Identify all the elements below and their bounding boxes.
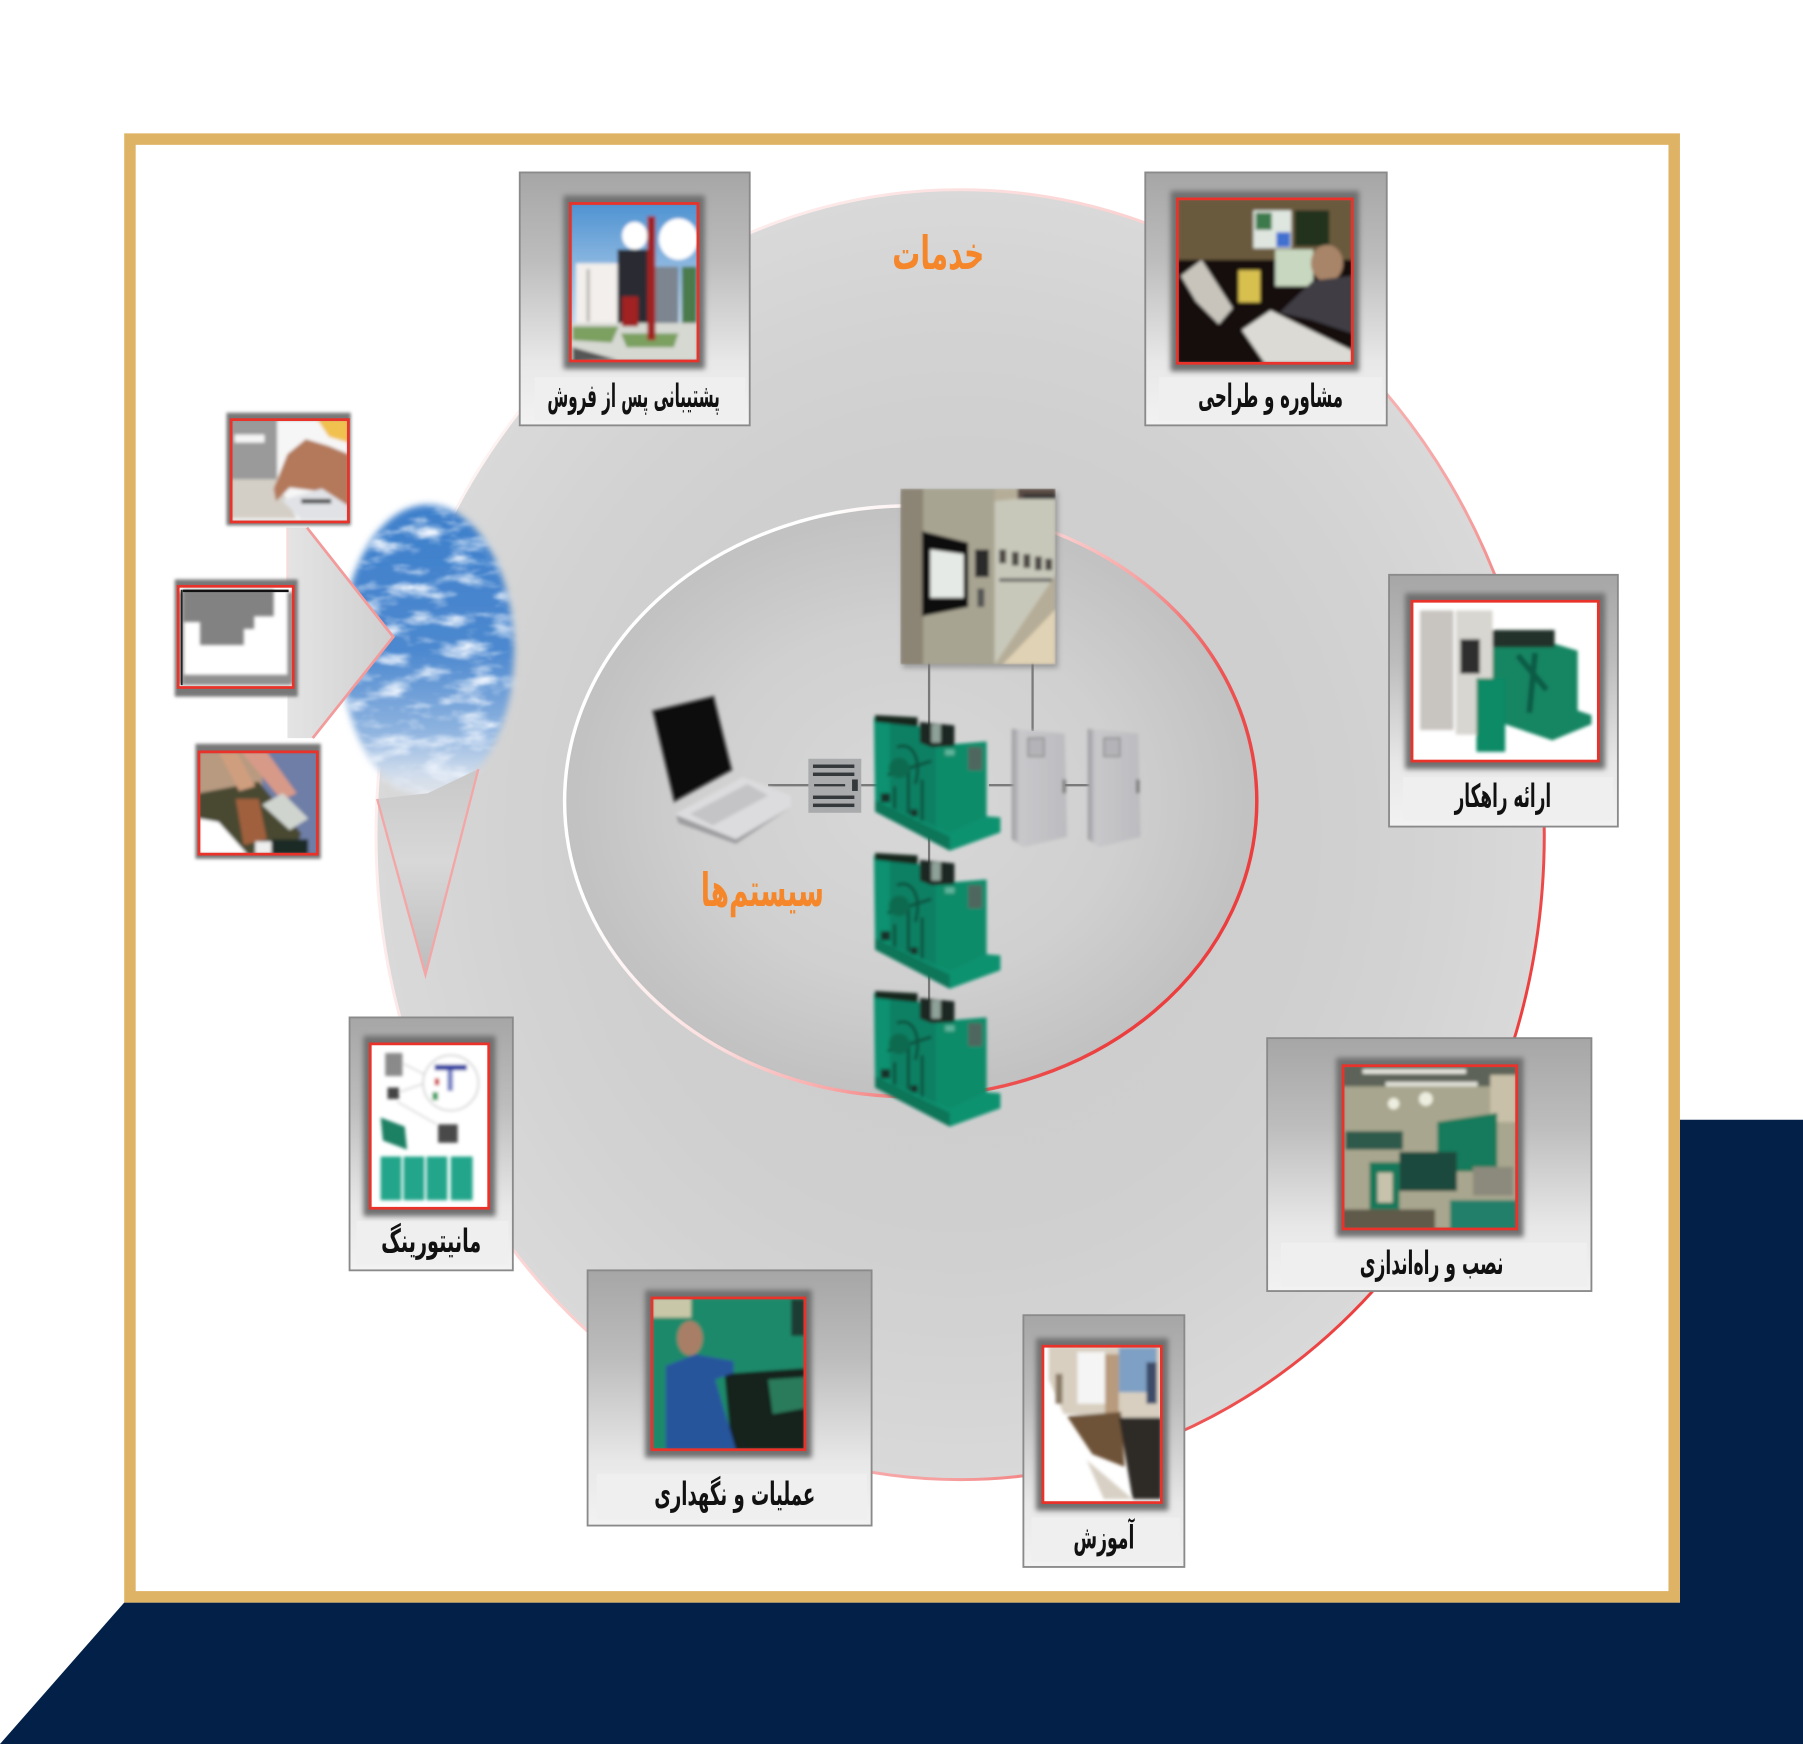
heading: services: خدمات <box>892 226 984 280</box>
generator 3 <box>874 991 1000 1127</box>
card: monitoring <box>350 1017 513 1270</box>
label: ارائه راهکار <box>1454 777 1551 815</box>
generator 2 <box>874 853 1000 989</box>
left pointer triangle <box>287 528 393 738</box>
photo: keyboard <box>227 413 351 525</box>
photo: building <box>563 195 705 369</box>
card: after-sales support <box>520 172 750 425</box>
photo: monitoring diagram <box>363 1036 496 1216</box>
label: آموزش <box>1073 1518 1135 1557</box>
photo: engineer at desk <box>1171 191 1359 371</box>
connection lines <box>768 661 1090 1012</box>
label: نصب و راه‌اندازی <box>1360 1244 1503 1282</box>
card: after-sales support: پشتیبانی پس از فروش <box>547 377 720 415</box>
label: مانیتورینگ <box>381 1222 481 1260</box>
card: training <box>1023 1315 1184 1567</box>
photo: hands with phone <box>195 744 321 859</box>
label: مشاوره و طراحی <box>1198 377 1343 415</box>
photo: technician <box>645 1290 812 1458</box>
photo: generator hall <box>1336 1058 1524 1237</box>
heading: systems: سیستم‌ها <box>701 863 824 917</box>
interface module <box>808 759 861 813</box>
control panel 1 <box>1012 729 1067 847</box>
lower pointer triangle <box>377 769 478 975</box>
card: installation and commissioning <box>1267 1038 1591 1291</box>
card: operation and maintenance <box>588 1270 872 1526</box>
control panel 2 <box>1088 729 1141 847</box>
card: consulting and design <box>1145 172 1387 425</box>
gold frame panel <box>130 139 1674 1597</box>
outer services circle <box>376 190 1544 1480</box>
inner systems ellipse <box>565 506 1257 1097</box>
photo: products <box>1405 593 1605 769</box>
photo: grey placeholder <box>175 579 298 697</box>
navy corner shape <box>0 1120 1803 1744</box>
photo: training room <box>1036 1338 1168 1511</box>
photo: switchboard <box>900 489 1058 668</box>
laptop <box>652 696 791 844</box>
generator 1 <box>874 715 1000 851</box>
sky ellipse <box>342 505 514 797</box>
label: عملیات و نگهداری <box>654 1475 815 1513</box>
card: solution delivery <box>1389 575 1618 827</box>
